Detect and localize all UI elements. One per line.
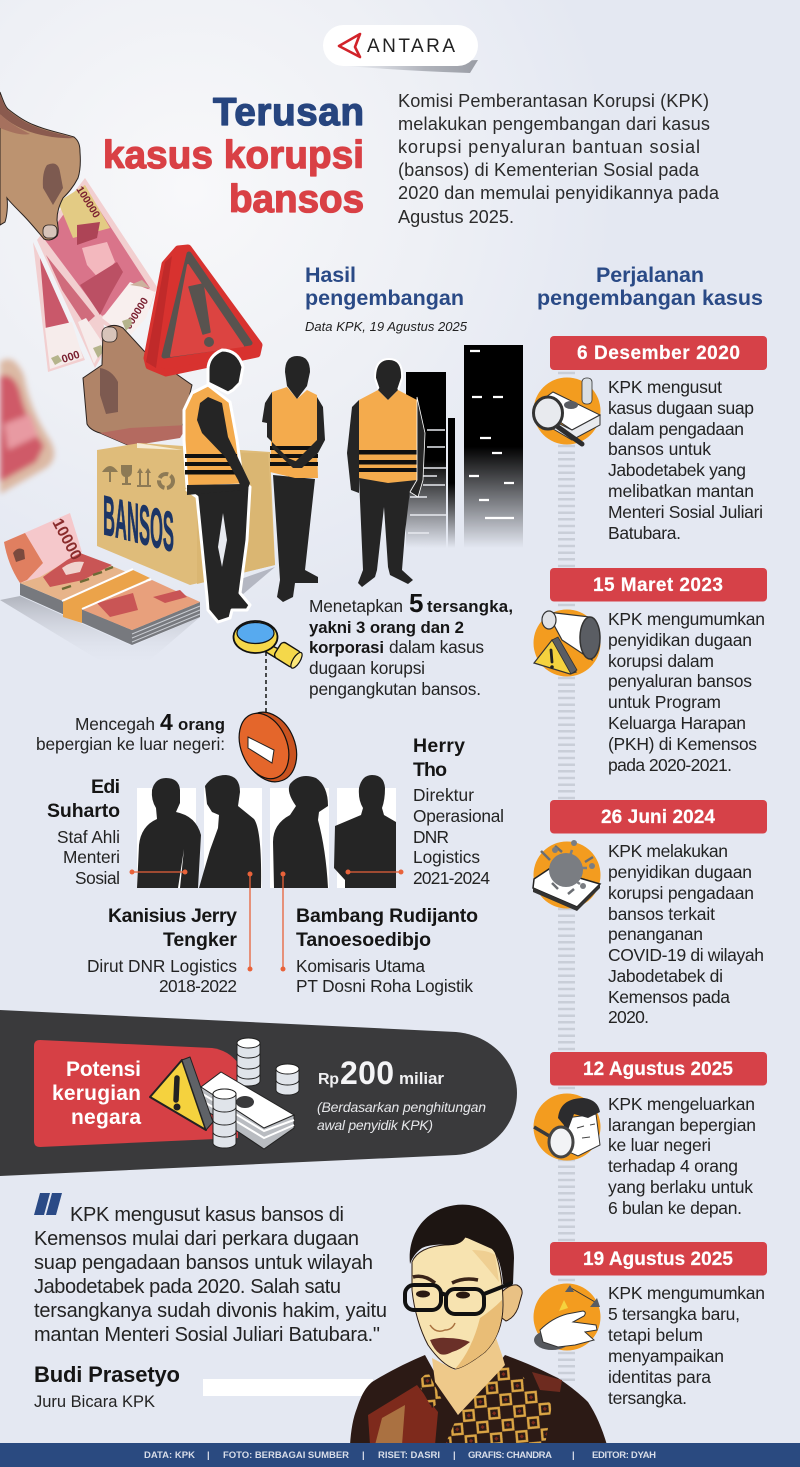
footer credits: RISET: DASRI xyxy=(378,1450,440,1461)
timeline event: 19 Agustus 2025 xyxy=(534,1242,767,1408)
timeline event: 15 Maret 2023: korupsi dalam xyxy=(608,651,714,671)
quote: suap pengadaan bansos untuk wilayah xyxy=(34,1252,373,1274)
icon: red warning triangle xyxy=(146,248,259,373)
text: mencegah 4 orang xyxy=(36,709,225,754)
footer credits: | xyxy=(362,1450,365,1461)
quote: Jabodetabek pada 2020. Salah satu xyxy=(34,1276,341,1298)
hair xyxy=(410,1205,514,1284)
timeline event: 19 Agustus 2025: 5 tersangka baru, xyxy=(608,1304,740,1324)
glasses xyxy=(405,1283,512,1314)
text: mencegah 4 orang: Mencegah xyxy=(75,714,155,734)
timeline event: 12 Agustus 2025: yang berlaku untuk xyxy=(608,1177,753,1197)
timeline event: 26 Juni 2024: penanganan xyxy=(608,924,703,944)
quote: tersangkanya sudah divonis hakim, yaitu xyxy=(34,1300,387,1322)
timeline event: 26 Juni 2024: Kemensos pada xyxy=(608,987,730,1007)
label: Herry Tho: Direktur xyxy=(413,785,474,805)
banknote: rear: 000 xyxy=(60,349,81,366)
label: Herry Tho xyxy=(413,735,504,888)
timeline event: 12 Agustus 2025: terhadap 4 orang xyxy=(608,1156,738,1176)
speaker: Budi Prasetyo: Budi Prasetyo xyxy=(34,1362,180,1387)
label: Herry Tho: Herry xyxy=(413,735,465,757)
figure: Rp200 miliar xyxy=(317,1055,486,1133)
figure: suspect 2 xyxy=(262,356,325,602)
text: 5 tersangka: tersangka, xyxy=(427,597,513,616)
banknote: rear xyxy=(33,242,85,372)
label: Kanisius Jerry Tengker: Kanisius Jerry xyxy=(108,905,237,927)
timeline event: 15 Maret 2023 xyxy=(534,568,767,775)
footer credits xyxy=(0,1443,800,1467)
shirt xyxy=(350,1355,607,1445)
timeline event: 15 Maret 2023: 15 Maret 2023 xyxy=(593,575,723,596)
quote: mantan Menteri Sosial Juliari Batubara." xyxy=(34,1324,380,1346)
illustration: hand passing banknotes xyxy=(0,92,192,446)
footer credits: EDITOR: DYAH xyxy=(592,1450,656,1461)
label: Edi Suharto: Staf Ahli xyxy=(57,827,120,847)
label: Edi Suharto: Menteri xyxy=(63,847,120,867)
icon: magnifying glass with dashed connector xyxy=(234,621,304,712)
figure: Rp200 miliar: (Berdasarkan penghitungan xyxy=(317,1099,486,1115)
figure: Rp200 miliar: awal penyidik KPK) xyxy=(317,1117,433,1133)
brows, eyes, nose, mouth xyxy=(413,1276,478,1283)
timeline event: 6 Desember 2020: 6 Desember 2020 xyxy=(577,343,740,364)
timeline event: 12 Agustus 2025: KPK mengeluarkan xyxy=(608,1094,755,1114)
label: Herry Tho: Operasional xyxy=(413,806,504,826)
label: Kanisius Jerry Tengker xyxy=(87,905,237,996)
silhouette: Herry Tho xyxy=(334,775,396,888)
timeline event: 26 Juni 2024: KPK melakukan xyxy=(608,841,728,861)
label: Bambang Rudijanto Tanoesoedibjo: Tanoesoedibjo xyxy=(296,929,431,951)
footer credits: | xyxy=(207,1450,210,1461)
intro text: 2020 dan memulai penyidikannya pada xyxy=(398,183,720,203)
label: Bambang Rudijanto Tanoesoedibjo: Bambang Rudijanto xyxy=(296,905,478,927)
timeline event: 19 Agustus 2025: tetapi belum xyxy=(608,1325,703,1345)
handling symbols xyxy=(102,465,173,488)
label: Herry Tho: 2021-2024 xyxy=(413,868,490,888)
text: 5 tersangka: dalam kasus xyxy=(389,637,484,657)
timeline event: 26 Juni 2024: penyidikan dugaan xyxy=(608,862,752,882)
hand: upper xyxy=(0,92,80,240)
money stack: 10000 xyxy=(48,516,84,563)
banknote: front: 100000 xyxy=(73,184,102,220)
silhouette: Kanisius Jerry Tengker xyxy=(199,775,261,888)
label: Kanisius Jerry Tengker: Tengker xyxy=(163,929,237,951)
label: Bambang Rudijanto Tanoesoedibjo xyxy=(296,905,478,996)
figure: Rp200 miliar: 200 xyxy=(340,1055,394,1091)
label: Edi Suharto: Edi xyxy=(91,776,120,798)
label: Potensi kerugian negara: kerugian xyxy=(52,1082,141,1105)
label: Herry Tho: Tho xyxy=(413,759,447,781)
footer credits: DATA: KPK xyxy=(144,1450,195,1461)
label: Bambang Rudijanto Tanoesoedibjo: Komisaris Utama xyxy=(296,956,425,976)
label: Herry Tho: DNR xyxy=(413,827,449,847)
icon: open hand xyxy=(534,1284,600,1350)
heading: Hasil pengembangan xyxy=(305,263,468,334)
quote: KPK mengusut kasus bansos di xyxy=(70,1204,344,1226)
icon: megaphone and warning xyxy=(534,610,600,676)
label: Bambang Rudijanto Tanoesoedibjo: PT Dosni Roha Logistik xyxy=(296,976,473,996)
heading: Perjalanan pengembangan kasus: pengembangan kasus xyxy=(537,286,763,310)
text: 5 tersangka: dugaan korupsi xyxy=(309,658,425,678)
icon: money under magnifier xyxy=(534,378,600,444)
face xyxy=(412,1237,503,1369)
timeline event: 26 Juni 2024: COVID-19 di wilayah xyxy=(608,945,764,965)
title: Terusan xyxy=(213,91,364,134)
timeline event: 6 Desember 2020: Jabodetabek yang xyxy=(608,460,746,480)
timeline event: 12 Agustus 2025: larangan bepergian xyxy=(608,1115,756,1135)
timeline event: 15 Maret 2023: penyaluran bansos xyxy=(608,671,752,691)
callout lines xyxy=(130,870,404,972)
footer credits: GRAFIS: CHANDRA xyxy=(468,1450,552,1461)
timeline event: 19 Agustus 2025: KPK mengumumkan xyxy=(608,1283,765,1303)
portrait: Budi Prasetyo xyxy=(350,1205,607,1445)
timeline event: 12 Agustus 2025: ke luar negeri xyxy=(608,1135,711,1155)
buildings xyxy=(406,345,523,548)
timeline event: 12 Agustus 2025: 12 Agustus 2025 xyxy=(583,1059,733,1080)
money stack xyxy=(0,513,200,668)
text: 5 tersangka: 5 xyxy=(409,588,423,618)
timeline event: 26 Juni 2024: korupsi pengadaan xyxy=(608,883,754,903)
timeline event: 6 Desember 2020: Batubara. xyxy=(608,523,681,543)
intro text: korupsi penyaluran bantuan sosial xyxy=(398,137,700,157)
footer credits: FOTO: BERBAGAI SUMBER xyxy=(223,1450,349,1461)
icon: no-entry sign xyxy=(230,704,307,790)
quote xyxy=(34,1193,387,1346)
timeline event: 6 Desember 2020: dalam pengadaan xyxy=(608,419,744,439)
cardboard box: BANSOS: BANSOS xyxy=(103,485,174,565)
timeline event: 15 Maret 2023: untuk Program xyxy=(608,692,721,712)
heading: Hasil pengembangan: Hasil xyxy=(305,263,356,287)
logo: ANTARA xyxy=(323,25,478,73)
panel: four silhouettes xyxy=(130,775,404,972)
label: Herry Tho: Logistics xyxy=(413,847,480,867)
neck xyxy=(432,1335,505,1415)
timeline event: 6 Desember 2020: bansos untuk xyxy=(608,439,711,459)
timeline event: 6 Desember 2020 xyxy=(534,336,767,543)
text: mencegah 4 orang: 4 xyxy=(160,709,173,735)
quote: Kemensos mulai dari perkara dugaan xyxy=(34,1228,359,1250)
intro text: (bansos) di Kementerian Sosial pada xyxy=(398,160,700,180)
label: Edi Suharto: Suharto xyxy=(47,800,120,822)
label: Kanisius Jerry Tengker: 2018-2022 xyxy=(159,976,237,996)
timeline event: 6 Desember 2020: KPK mengusut xyxy=(608,377,722,397)
speaker: Budi Prasetyo xyxy=(34,1362,180,1411)
icon: warning with money and coins xyxy=(150,1038,299,1149)
timeline event: 15 Maret 2023: penyidikan dugaan xyxy=(608,630,752,650)
timeline event: 6 Desember 2020: kasus dugaan suap xyxy=(608,398,754,418)
heading: Perjalanan pengembangan kasus: Perjalanan xyxy=(596,263,704,287)
icon: face under magnifier xyxy=(534,1094,600,1160)
icon: quotation mark xyxy=(34,1193,62,1215)
heading: Hasil pengembangan: pengembangan xyxy=(305,286,464,310)
heading: Hasil pengembangan: Data KPK, 19 Agustus 2025 xyxy=(305,319,468,334)
timeline event: 15 Maret 2023: Keluarga Harapan xyxy=(608,713,746,733)
timeline event: 15 Maret 2023: KPK mengumumkan xyxy=(608,609,765,629)
cardboard box: BANSOS xyxy=(97,443,275,595)
blurred banknote, left edge xyxy=(0,359,54,494)
title: bansos xyxy=(229,178,364,221)
label: Kanisius Jerry Tengker: Dirut DNR Logistics xyxy=(87,956,237,976)
logo: ANTARA: ANTARA xyxy=(367,36,455,57)
timeline event: 19 Agustus 2025: menyampaikan xyxy=(608,1346,724,1366)
timeline event: 19 Agustus 2025: identitas para xyxy=(608,1367,711,1387)
hand: lower xyxy=(83,325,192,446)
icon: virus on tablet xyxy=(533,840,600,911)
timeline event: 26 Juni 2024: Jabodetabek di xyxy=(608,966,723,986)
timeline event: 26 Juni 2024 xyxy=(533,800,767,1027)
label: Edi Suharto xyxy=(47,776,120,888)
timeline event: 12 Agustus 2025: 6 bulan ke depan. xyxy=(608,1198,742,1218)
label: Potensi kerugian negara xyxy=(52,1058,141,1129)
timeline event: 6 Desember 2020: Menteri Sosial Juliari xyxy=(608,502,763,522)
timeline event: 12 Agustus 2025 xyxy=(534,1052,767,1218)
text: mencegah 4 orang: orang xyxy=(178,715,225,734)
title xyxy=(103,91,364,221)
timeline event: 26 Juni 2024: bansos terkait xyxy=(608,904,715,924)
figure: suspect 3 xyxy=(347,359,425,587)
timeline event: 15 Maret 2023: pada 2020-2021. xyxy=(608,755,732,775)
text: 5 tersangka: Menetapkan xyxy=(309,596,403,616)
timeline event: 19 Agustus 2025: 19 Agustus 2025 xyxy=(583,1249,733,1270)
timeline event: 15 Maret 2023: (PKH) di Kemensos xyxy=(608,734,757,754)
intro text: melakukan pengembangan dari kasus xyxy=(398,114,710,134)
intro text: Agustus 2025. xyxy=(398,207,514,227)
heading: Perjalanan pengembangan kasus xyxy=(537,263,763,310)
timeline event: 19 Agustus 2025: tersangka. xyxy=(608,1388,687,1408)
timeline event: 6 Desember 2020: melibatkan mantan xyxy=(608,481,754,501)
banknote: front xyxy=(37,178,157,340)
label: Potensi kerugian negara: Potensi xyxy=(66,1058,141,1081)
speaker: Budi Prasetyo: Juru Bicara KPK xyxy=(34,1393,155,1411)
silhouette: Bambang Rudijanto Tanoesoedibjo xyxy=(273,776,328,888)
decorative white bar xyxy=(203,1379,373,1396)
figure: Rp200 miliar: miliar xyxy=(399,1069,444,1088)
intro text xyxy=(398,91,720,227)
text: 5 tersangka: korporasi xyxy=(309,638,384,657)
figure: Rp200 miliar: Rp xyxy=(318,1071,339,1088)
text: 5 tersangka xyxy=(309,588,513,699)
title: kasus korupsi xyxy=(103,134,364,177)
label: Edi Suharto: Sosial xyxy=(75,868,120,888)
footer credits: | xyxy=(572,1450,575,1461)
label: Potensi kerugian negara: negara xyxy=(71,1106,141,1129)
footer credits: | xyxy=(453,1450,456,1461)
text: mencegah 4 orang: bepergian ke luar negeri: xyxy=(36,734,225,754)
figure: suspect 1 xyxy=(184,350,250,622)
silhouette: Edi Suharto xyxy=(137,778,201,888)
text: 5 tersangka: pengangkutan bansos. xyxy=(309,679,481,699)
intro text: Komisi Pemberantasan Korupsi (KPK) xyxy=(398,91,709,111)
timeline event: 26 Juni 2024: 2020. xyxy=(608,1007,649,1027)
text: 5 tersangka: yakni 3 orang dan 2 xyxy=(309,618,464,637)
banknote: front: 000000 xyxy=(122,295,151,332)
timeline event: 26 Juni 2024: 26 Juni 2024 xyxy=(601,807,715,828)
panel: potential state loss xyxy=(0,1010,517,1176)
banknote: middle xyxy=(37,240,108,368)
ear xyxy=(502,1285,522,1321)
